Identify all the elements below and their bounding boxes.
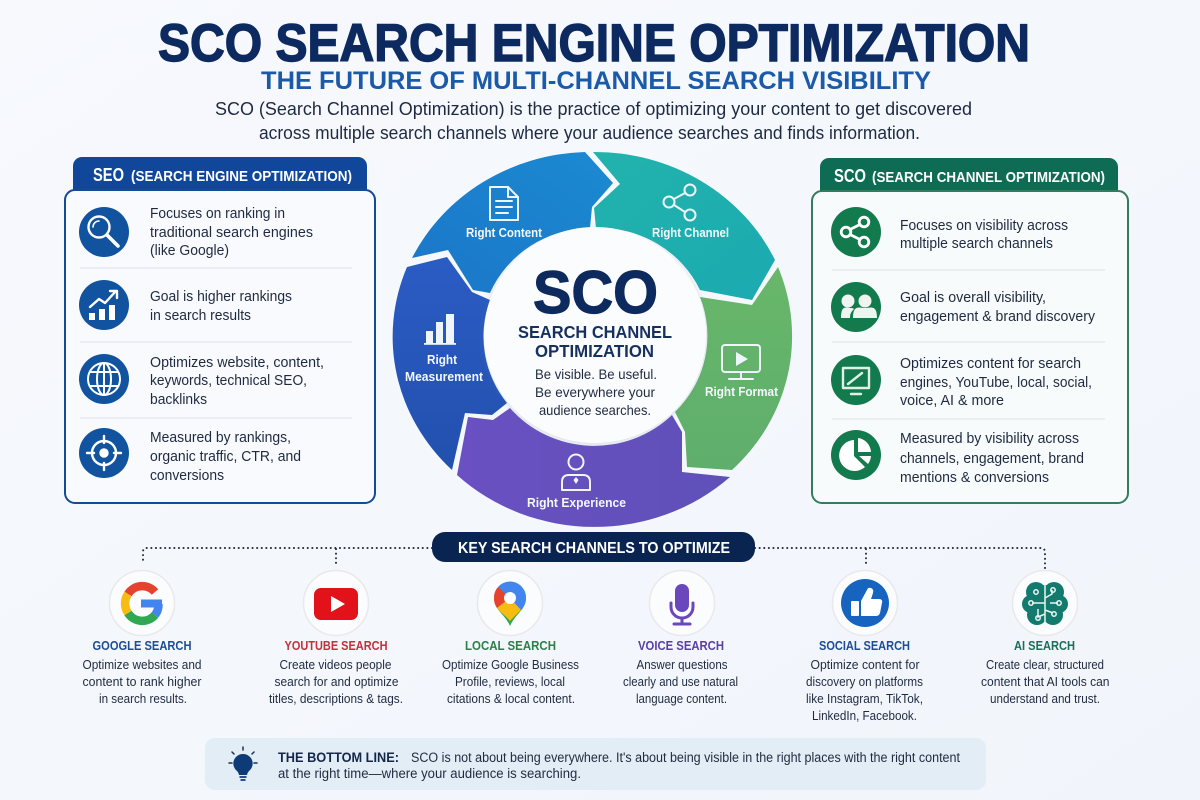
SEO point 4: organic traffic, CTR, and bbox=[150, 449, 301, 465]
icon: Google G bbox=[110, 570, 174, 636]
channel description: Answer questions bbox=[636, 658, 728, 672]
icon: growth chart bbox=[79, 280, 129, 330]
channel description: Create videos people bbox=[280, 658, 392, 672]
SCO point 4: Measured by visibility across bbox=[900, 431, 1079, 447]
icon: microphone bbox=[650, 570, 714, 636]
channel description: Optimize websites and bbox=[82, 658, 202, 672]
SCO point 3: engines, YouTube, local, social, bbox=[900, 375, 1092, 391]
channel description bbox=[981, 658, 1110, 706]
SCO point 3: Optimizes content for search bbox=[900, 356, 1081, 372]
SCO panel heading: SCO bbox=[834, 166, 866, 186]
callout text: SCO is not about being everywhere. It's about being visible in the right places with the right content bbox=[411, 750, 960, 765]
channel title: GOOGLE SEARCH bbox=[92, 639, 192, 653]
segment: Right Measurement: Right bbox=[427, 353, 458, 367]
icon: target bbox=[79, 428, 129, 478]
SCO point 2: Goal is overall visibility, bbox=[900, 290, 1046, 306]
intro text: SCO (Search Channel Optimization) is the practice of optimizing your content to get discovered bbox=[215, 99, 972, 119]
channel description bbox=[442, 658, 579, 706]
SCO point 3: voice, AI & more bbox=[900, 393, 1004, 409]
icon: pie chart bbox=[831, 430, 881, 480]
segment: Right Content: Right Content bbox=[466, 226, 543, 240]
SCO point 3 bbox=[900, 356, 1092, 409]
segment: Right Measurement bbox=[393, 257, 507, 470]
center text bbox=[518, 259, 672, 418]
channel: Voice Search bbox=[623, 570, 738, 706]
SCO point 2 bbox=[900, 290, 1096, 325]
SEO point 3: keywords, technical SEO, bbox=[150, 373, 307, 389]
icon: YouTube bbox=[304, 570, 368, 636]
SEO panel heading: (SEARCH ENGINE OPTIMIZATION) bbox=[131, 168, 352, 185]
channel description: clearly and use natural bbox=[623, 675, 738, 689]
SCO panel heading: (SEARCH CHANNEL OPTIMIZATION) bbox=[872, 169, 1105, 186]
channel description: content that AI tools can bbox=[981, 675, 1110, 689]
icon: thumbs up bbox=[832, 570, 898, 636]
SEO point 4: conversions bbox=[150, 468, 224, 484]
SCO point 4 bbox=[900, 431, 1084, 486]
SCO point 1: Focuses on visibility across bbox=[900, 218, 1068, 234]
channel description: Create clear, structured bbox=[986, 658, 1104, 672]
subtitle: THE FUTURE OF MULTI-CHANNEL SEARCH VISIBILITY bbox=[261, 67, 931, 95]
SEO point 2 bbox=[150, 289, 292, 324]
channel title: SOCIAL SEARCH bbox=[819, 639, 910, 653]
SCO point 4: channels, engagement, brand bbox=[900, 451, 1084, 467]
channel description: Optimize Google Business bbox=[442, 658, 579, 672]
center text: Be everywhere your bbox=[535, 384, 655, 400]
center text: SEARCH CHANNEL bbox=[518, 322, 672, 342]
connector: dotted lines bbox=[143, 548, 1045, 570]
channel: AI Search bbox=[981, 570, 1110, 706]
icon: light bulb bbox=[229, 747, 257, 780]
segment: Right Experience bbox=[457, 408, 730, 527]
channel description: in search results. bbox=[99, 692, 187, 706]
SEO panel heading bbox=[93, 165, 352, 185]
icon: AI brain bbox=[1012, 570, 1078, 636]
channel: YouTube Search bbox=[269, 570, 403, 706]
channel description bbox=[623, 658, 738, 706]
channel: Local Search bbox=[442, 570, 579, 706]
channel description: Profile, reviews, local bbox=[455, 675, 565, 689]
SEO point 4: Measured by rankings, bbox=[150, 430, 291, 446]
SEO point 4 bbox=[150, 430, 301, 484]
SEO panel heading: SEO bbox=[93, 165, 124, 185]
SEO point 1: Focuses on ranking in bbox=[150, 206, 285, 222]
channel description: language content. bbox=[636, 692, 727, 706]
channel description bbox=[806, 658, 923, 723]
SCO panel box bbox=[812, 191, 1128, 503]
intro text: across multiple search channels where your audience searches and finds information. bbox=[259, 123, 920, 143]
SCO point 2: engagement & brand discovery bbox=[900, 309, 1096, 325]
center disc bbox=[484, 227, 706, 443]
segment: Right Format bbox=[675, 267, 792, 470]
channel description: citations & local content. bbox=[447, 692, 575, 706]
title: SCO SEARCH ENGINE OPTIMIZATION bbox=[158, 14, 1030, 73]
channel description bbox=[269, 658, 403, 706]
panel: SEO bbox=[65, 157, 375, 503]
SEO point 1: (like Google) bbox=[150, 243, 229, 259]
center text: Be visible. Be useful. bbox=[535, 366, 657, 382]
channel title: YOUTUBE SEARCH bbox=[284, 639, 388, 653]
icon: map pin bbox=[478, 570, 542, 636]
channel description: search for and optimize bbox=[274, 675, 399, 689]
intro text bbox=[215, 99, 972, 143]
SCO panel header tab bbox=[820, 158, 1118, 193]
segment: Right Format: Right Format bbox=[705, 385, 779, 399]
callout: bottom line bbox=[205, 738, 986, 790]
segment: Right Channel: Right Channel bbox=[652, 226, 729, 240]
SEO panel header tab bbox=[73, 157, 367, 192]
SEO point 3 bbox=[150, 355, 324, 408]
section heading: key search channels: KEY SEARCH CHANNELS TO OPTIMIZE bbox=[458, 540, 730, 557]
SEO point 1 bbox=[150, 206, 313, 259]
channel description: understand and trust. bbox=[990, 692, 1100, 706]
channel description: LinkedIn, Facebook. bbox=[812, 709, 917, 723]
channel description: titles, descriptions & tags. bbox=[269, 692, 403, 706]
SCO point 1: multiple search channels bbox=[900, 236, 1053, 252]
channel title: LOCAL SEARCH bbox=[465, 639, 556, 653]
center text: audience searches. bbox=[539, 402, 651, 418]
icon: magnifier bbox=[79, 207, 129, 257]
callout text bbox=[278, 750, 960, 781]
icon: monitor bbox=[831, 355, 881, 405]
icon: people bbox=[831, 282, 881, 332]
SEO point 2: in search results bbox=[150, 308, 251, 324]
icon: share bbox=[831, 207, 881, 257]
channel: Social Search bbox=[806, 570, 923, 723]
channel description: Optimize content for bbox=[810, 658, 920, 672]
callout text: THE BOTTOM LINE: bbox=[278, 750, 399, 765]
SEO point 3: backlinks bbox=[150, 392, 207, 408]
channel: Google Search bbox=[82, 570, 202, 706]
center text: OPTIMIZATION bbox=[535, 341, 654, 361]
channel description bbox=[82, 658, 202, 706]
segment: Right Measurement: Measurement bbox=[405, 370, 484, 384]
wheel diagram bbox=[393, 152, 792, 527]
SCO point 1 bbox=[900, 218, 1068, 252]
center text: SCO bbox=[533, 259, 658, 326]
SEO point 1: traditional search engines bbox=[150, 225, 313, 241]
channel description: like Instagram, TikTok, bbox=[806, 692, 923, 706]
segment: Right Channel bbox=[593, 152, 775, 300]
section heading: key search channels bbox=[432, 532, 755, 562]
SEO panel box bbox=[65, 190, 375, 503]
channel title: VOICE SEARCH bbox=[638, 639, 724, 653]
icon: globe bbox=[79, 354, 129, 404]
SEO point 3: Optimizes website, content, bbox=[150, 355, 324, 371]
channel description: content to rank higher bbox=[82, 675, 202, 689]
SCO point 4: mentions & conversions bbox=[900, 470, 1049, 486]
callout text: at the right time—where your audience is searching. bbox=[278, 766, 581, 781]
SEO point 2: Goal is higher rankings bbox=[150, 289, 292, 305]
panel: SCO bbox=[812, 158, 1128, 503]
channel description: discovery on platforms bbox=[806, 675, 923, 689]
channel title: AI SEARCH bbox=[1014, 639, 1075, 653]
segment: Right Experience: Right Experience bbox=[527, 496, 626, 510]
SCO panel heading bbox=[834, 166, 1105, 186]
segment: Right Content bbox=[412, 152, 613, 293]
